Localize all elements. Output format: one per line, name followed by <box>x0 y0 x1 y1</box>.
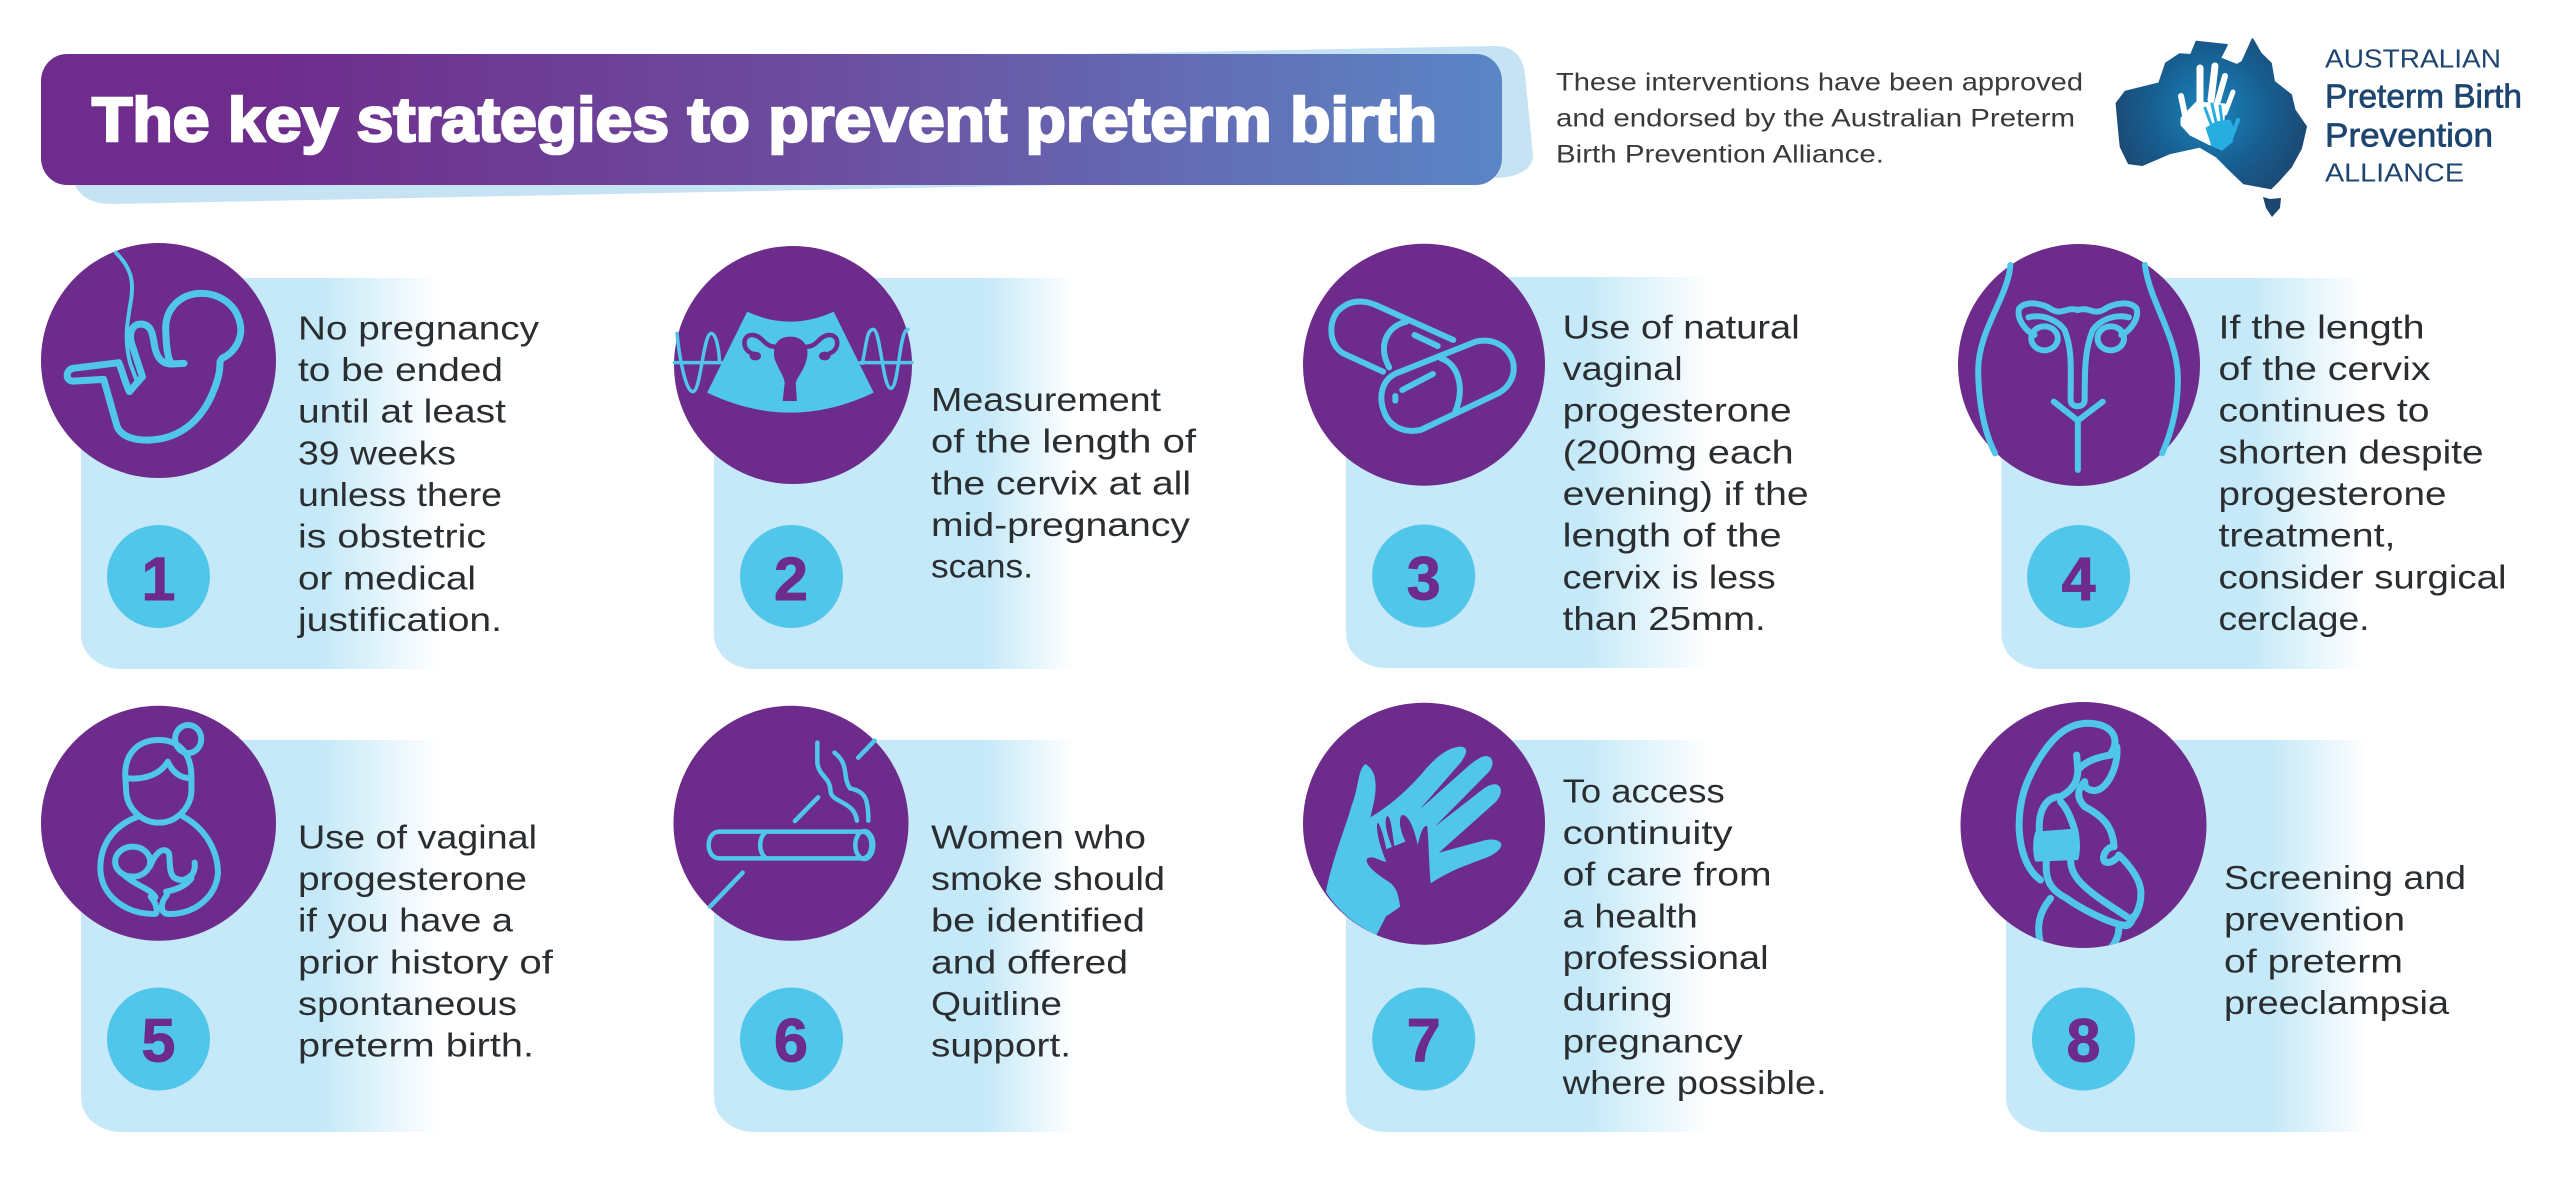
number badge 6 <box>740 988 843 1090</box>
strategy 1 text: unless there <box>298 476 502 513</box>
icon disc <box>41 706 276 941</box>
endorsement text: and endorsed by the Australian Preterm <box>1556 105 2075 133</box>
number badge 1: 1 <box>142 545 175 613</box>
panel: strategy 6 <box>674 706 1165 1132</box>
strategy 8 text: preeclampsia <box>2224 984 2450 1021</box>
icon disc <box>1958 244 2200 486</box>
logo wordmark: ALLIANCE <box>2325 158 2464 188</box>
panel: strategy 1 <box>41 243 540 669</box>
strategy 2 text: scans. <box>931 548 1033 585</box>
logo wordmark: Prevention <box>2325 117 2493 154</box>
strategy 4 text: If the length <box>2218 308 2424 345</box>
strategy 8 text <box>2224 859 2466 1021</box>
strategy 7 text <box>1562 772 1827 1101</box>
strategy 7 text: where possible. <box>1562 1064 1827 1101</box>
strategy 1 text: 39 weeks <box>298 434 456 471</box>
endorsement text: Birth Prevention Alliance. <box>1556 141 1884 169</box>
strategy 2 text: Measurement <box>931 381 1161 418</box>
icon disc <box>1303 244 1545 486</box>
strategy 6 text: smoke should <box>931 860 1165 897</box>
panel: strategy 5 <box>41 706 554 1132</box>
number badge 7 <box>1372 988 1475 1090</box>
strategy 6 text: be identified <box>931 902 1145 939</box>
panel: strategy 7 <box>1303 703 1827 1132</box>
icon disc <box>674 706 908 941</box>
card background <box>2002 278 2364 669</box>
number badge 4 <box>2027 525 2130 628</box>
strategy 8 text: Screening and <box>2224 859 2466 896</box>
strategy 7 text: during <box>1563 981 1673 1018</box>
icon: blue child hand <box>2205 104 2238 150</box>
strategy 4 text: treatment, <box>2218 517 2396 554</box>
number badge 3 <box>1372 524 1475 628</box>
banner bar <box>41 54 1502 185</box>
strategy 3 text <box>1563 308 1809 637</box>
strategy 1 text: until at least <box>298 393 506 430</box>
strategy 5 text: Use of vaginal <box>298 818 537 855</box>
logo wordmark <box>2325 43 2522 188</box>
icon: pregnant woman with blood pressure cuff <box>2019 723 2141 948</box>
panel: strategy 3 <box>1303 244 1809 668</box>
strategy 7 text: professional <box>1563 939 1769 976</box>
strategy 2 text <box>931 381 1197 585</box>
endorsement text: These interventions have been approved <box>1556 69 2083 97</box>
strategy 2 text: of the length of <box>931 423 1197 460</box>
logo: Australian Preterm Birth Prevention Alliance <box>2117 39 2522 217</box>
strategy 5 text: progesterone <box>298 860 527 897</box>
strategy 3 text: Use of natural <box>1563 308 1800 345</box>
card background <box>714 278 1074 669</box>
icon: ultrasound of uterus <box>674 312 912 413</box>
strategy 8 text: of preterm <box>2224 942 2403 979</box>
icon disc <box>41 243 276 478</box>
strategy 5 text: preterm birth. <box>298 1027 534 1064</box>
icon: fetus <box>67 253 241 440</box>
strategy 1 text <box>297 309 540 638</box>
strategy 2 text: mid-pregnancy <box>931 506 1191 543</box>
strategy 1 text: justification. <box>297 601 502 638</box>
title: The key strategies to prevent preterm birth <box>92 86 1437 155</box>
strategy 1 text: or medical <box>298 559 476 596</box>
strategy 1 text: No pregnancy <box>298 309 540 346</box>
card background <box>81 278 440 669</box>
strategy 4 text: shorten despite <box>2218 433 2484 470</box>
strategy 5 text: prior history of <box>298 943 554 980</box>
strategy 4 text: cerclage. <box>2218 600 2370 637</box>
endorsement text <box>1556 69 2083 169</box>
strategy 4 text: progesterone <box>2218 475 2446 512</box>
strategy 7 text: of care from <box>1563 856 1772 893</box>
card background <box>81 740 440 1132</box>
card background <box>714 740 1074 1132</box>
title banner <box>41 46 1533 204</box>
strategy 4 text: continues to <box>2218 392 2430 429</box>
strategy 5 text: spontaneous <box>298 985 517 1022</box>
panel: strategy 2 <box>674 246 1197 669</box>
number badge 5 <box>107 988 210 1090</box>
strategy 4 text: consider surgical <box>2218 558 2506 595</box>
icon: map of Australia <box>2117 39 2306 188</box>
strategy 7 text: pregnancy <box>1563 1022 1743 1059</box>
icon: capsules <box>1331 302 1514 431</box>
icon: crossed cigarette <box>709 741 874 907</box>
strategy 7 text: To access <box>1563 772 1725 809</box>
strategy 4 text <box>2218 308 2506 637</box>
strategy 6 text: and offered <box>931 943 1128 980</box>
strategy 3 text: vaginal <box>1563 350 1683 387</box>
number badge 6: 6 <box>774 1006 808 1074</box>
number badge 4: 4 <box>2062 545 2096 613</box>
strategy 3 text: progesterone <box>1563 392 1792 429</box>
strategy 6 text: support. <box>931 1027 1071 1064</box>
strategy 3 text: (200mg each <box>1563 433 1794 470</box>
icon disc <box>674 246 912 484</box>
logo wordmark: Preterm Birth <box>2325 77 2522 114</box>
icon: adult and child hands <box>1326 747 1501 950</box>
icon disc <box>1303 703 1545 945</box>
strategy 3 text: than 25mm. <box>1563 600 1766 637</box>
number badge 5: 5 <box>142 1006 175 1074</box>
strategy 8 text: prevention <box>2224 901 2405 938</box>
strategy 7 text: a health <box>1563 897 1698 934</box>
logo wordmark: AUSTRALIAN <box>2325 43 2501 73</box>
banner backing shape <box>73 46 1533 204</box>
icon: mother and baby <box>100 725 218 914</box>
strategy 7 text: continuity <box>1563 814 1733 851</box>
panel: strategy 8 <box>1960 702 2466 1132</box>
strategy 4 text: of the cervix <box>2218 350 2431 387</box>
strategy 6 text: Quitline <box>931 985 1062 1022</box>
strategy 6 text <box>931 818 1165 1064</box>
strategy 1 text: to be ended <box>298 351 503 388</box>
number badge 3: 3 <box>1407 544 1441 612</box>
card background <box>1346 277 1710 668</box>
number badge 2: 2 <box>774 545 808 613</box>
number badge 8 <box>2032 988 2135 1090</box>
strategy 3 text: cervix is less <box>1563 558 1776 595</box>
number badge 7: 7 <box>1407 1006 1441 1074</box>
strategy 5 text: if you have a <box>298 902 514 939</box>
strategy 6 text: Women who <box>931 818 1146 855</box>
strategy 3 text: evening) if the <box>1563 475 1809 512</box>
panel: strategy 4 <box>1958 244 2506 669</box>
icon: Tasmania <box>2263 197 2281 217</box>
strategy 1 text: is obstetric <box>298 518 486 555</box>
number badge 1 <box>107 525 210 628</box>
card background <box>2006 740 2368 1132</box>
strategy 5 text <box>298 818 554 1064</box>
number badge 2 <box>740 525 843 628</box>
number badge 8: 8 <box>2067 1006 2100 1074</box>
strategy 2 text: the cervix at all <box>931 464 1191 501</box>
card background <box>1346 740 1710 1132</box>
icon disc <box>1960 702 2206 948</box>
strategy 3 text: length of the <box>1563 517 1782 554</box>
icon: reproductive system <box>1978 265 2178 470</box>
icon: white hand <box>2181 66 2233 145</box>
